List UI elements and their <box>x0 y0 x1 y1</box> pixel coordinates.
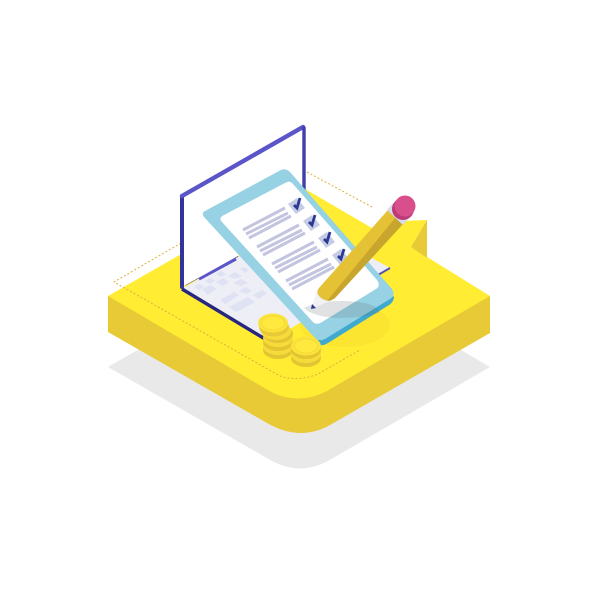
laptop base <box>183 220 390 341</box>
laptop hinge <box>185 256 238 285</box>
laptop screen <box>182 127 303 287</box>
platform side <box>108 296 490 433</box>
checkbox 2 <box>303 215 320 231</box>
checkbox 1 <box>288 198 305 214</box>
text lines <box>243 208 334 289</box>
pencil tip <box>311 288 333 309</box>
pencil nib <box>311 304 316 309</box>
screen left bezel <box>180 197 184 287</box>
dotted outline <box>114 172 372 379</box>
platform top <box>108 186 490 399</box>
screen top bezel <box>182 127 303 196</box>
coins large stack <box>258 314 293 359</box>
checkbox 4 <box>332 249 349 265</box>
pencil shadow <box>304 301 380 318</box>
coins small stack <box>291 336 321 367</box>
keyboard keys <box>194 267 267 312</box>
ground shadow <box>108 291 490 468</box>
pencil <box>311 196 416 309</box>
screen right bezel <box>302 128 306 192</box>
pencil eraser <box>392 196 416 220</box>
pencil body <box>317 210 403 300</box>
checkbox 3 <box>318 232 335 248</box>
paper sheet <box>220 182 379 324</box>
clipboard edge <box>316 296 394 345</box>
platform notch fold <box>411 220 427 258</box>
pencil ferrule <box>387 203 409 225</box>
laptop front edge <box>182 289 270 342</box>
pencil body shading <box>327 217 403 301</box>
platform <box>108 186 490 433</box>
clipboard <box>203 169 394 345</box>
laptop <box>182 127 390 342</box>
soft shadow under clipboard <box>300 303 390 347</box>
clipboard board <box>203 169 394 340</box>
laptop right edge <box>378 268 390 275</box>
